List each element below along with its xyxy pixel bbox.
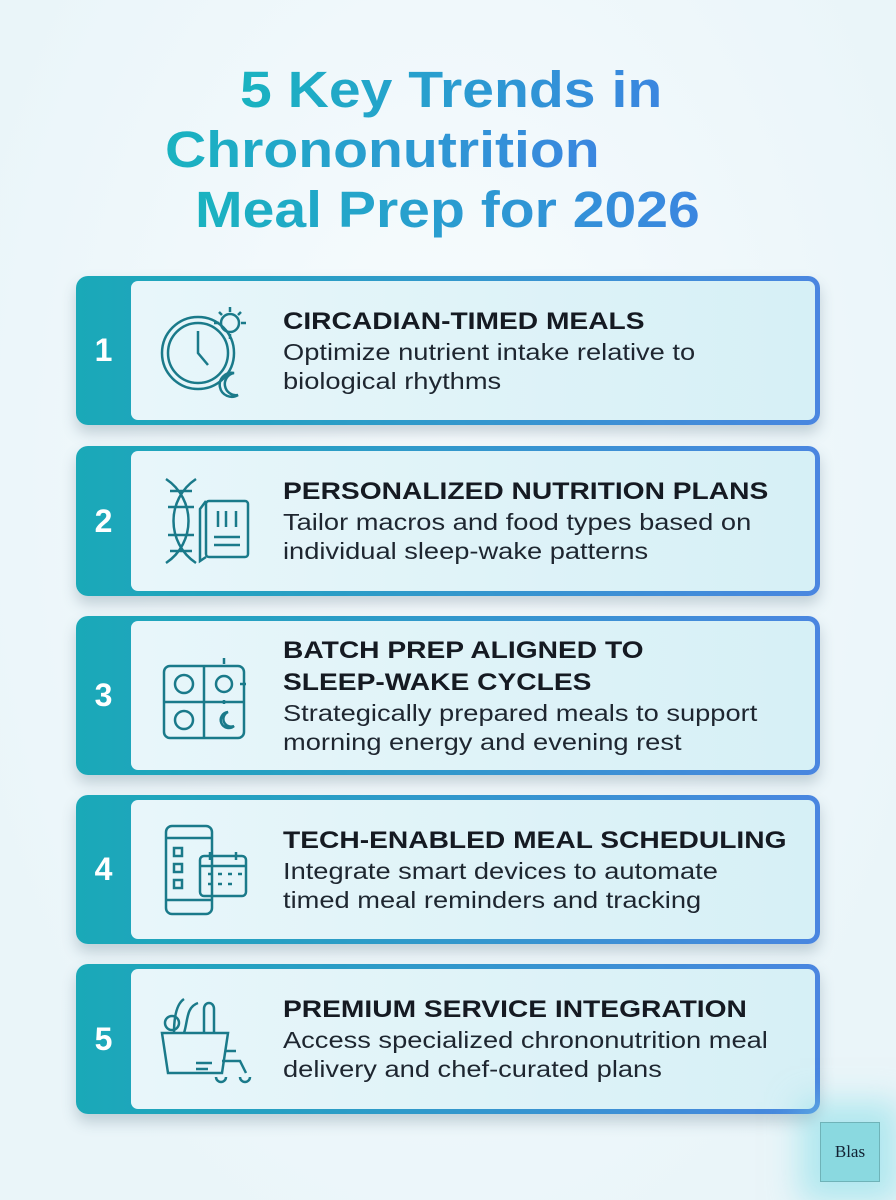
card 3	[76, 616, 820, 775]
watermark badge	[820, 1122, 880, 1182]
card 1: biological rhythms	[283, 368, 501, 394]
card 4: Integrate smart devices to automate	[283, 858, 718, 884]
card 5: 5	[95, 1020, 112, 1056]
card 5	[76, 964, 820, 1114]
card 2: PERSONALIZED NUTRITION PLANS	[283, 478, 768, 505]
title: 5 Key Trends in	[240, 61, 662, 118]
icon: clock sun moon	[160, 307, 246, 398]
card 3: BATCH PREP ALIGNED TO	[283, 636, 644, 664]
icon: phone calendar	[164, 824, 248, 916]
card 5: delivery and chef-curated plans	[283, 1056, 662, 1082]
icon: dna and menu	[165, 478, 250, 564]
card 1: Optimize nutrient intake relative to	[283, 338, 695, 364]
icon: meal prep container	[162, 658, 246, 740]
card 2: individual sleep-wake patterns	[283, 538, 648, 564]
card 4: timed meal reminders and tracking	[283, 886, 701, 912]
card 4: 4	[95, 851, 112, 887]
card 4	[76, 795, 820, 944]
card 1	[76, 276, 820, 425]
title: Chrononutrition	[165, 121, 600, 178]
card 5: Access specialized chrononutrition meal	[283, 1027, 768, 1053]
card 1: 1	[95, 332, 112, 368]
card 3: Strategically prepared meals to support	[283, 700, 757, 726]
card 5: PREMIUM SERVICE INTEGRATION	[283, 996, 747, 1023]
card 3: 3	[95, 677, 112, 713]
watermark badge: Blas	[835, 1142, 865, 1161]
card 2	[76, 446, 820, 596]
icon: grocery basket scooter	[160, 998, 252, 1084]
card 4: TECH-ENABLED MEAL SCHEDULING	[283, 826, 787, 854]
card 2: 2	[95, 502, 112, 538]
title: Meal Prep for 2026	[195, 181, 700, 238]
card 3: SLEEP-WAKE CYCLES	[283, 668, 591, 696]
card 1: CIRCADIAN-TIMED MEALS	[283, 308, 645, 334]
card 2: Tailor macros and food types based on	[283, 509, 751, 535]
card 3: morning energy and evening rest	[283, 728, 682, 754]
title	[165, 61, 700, 238]
